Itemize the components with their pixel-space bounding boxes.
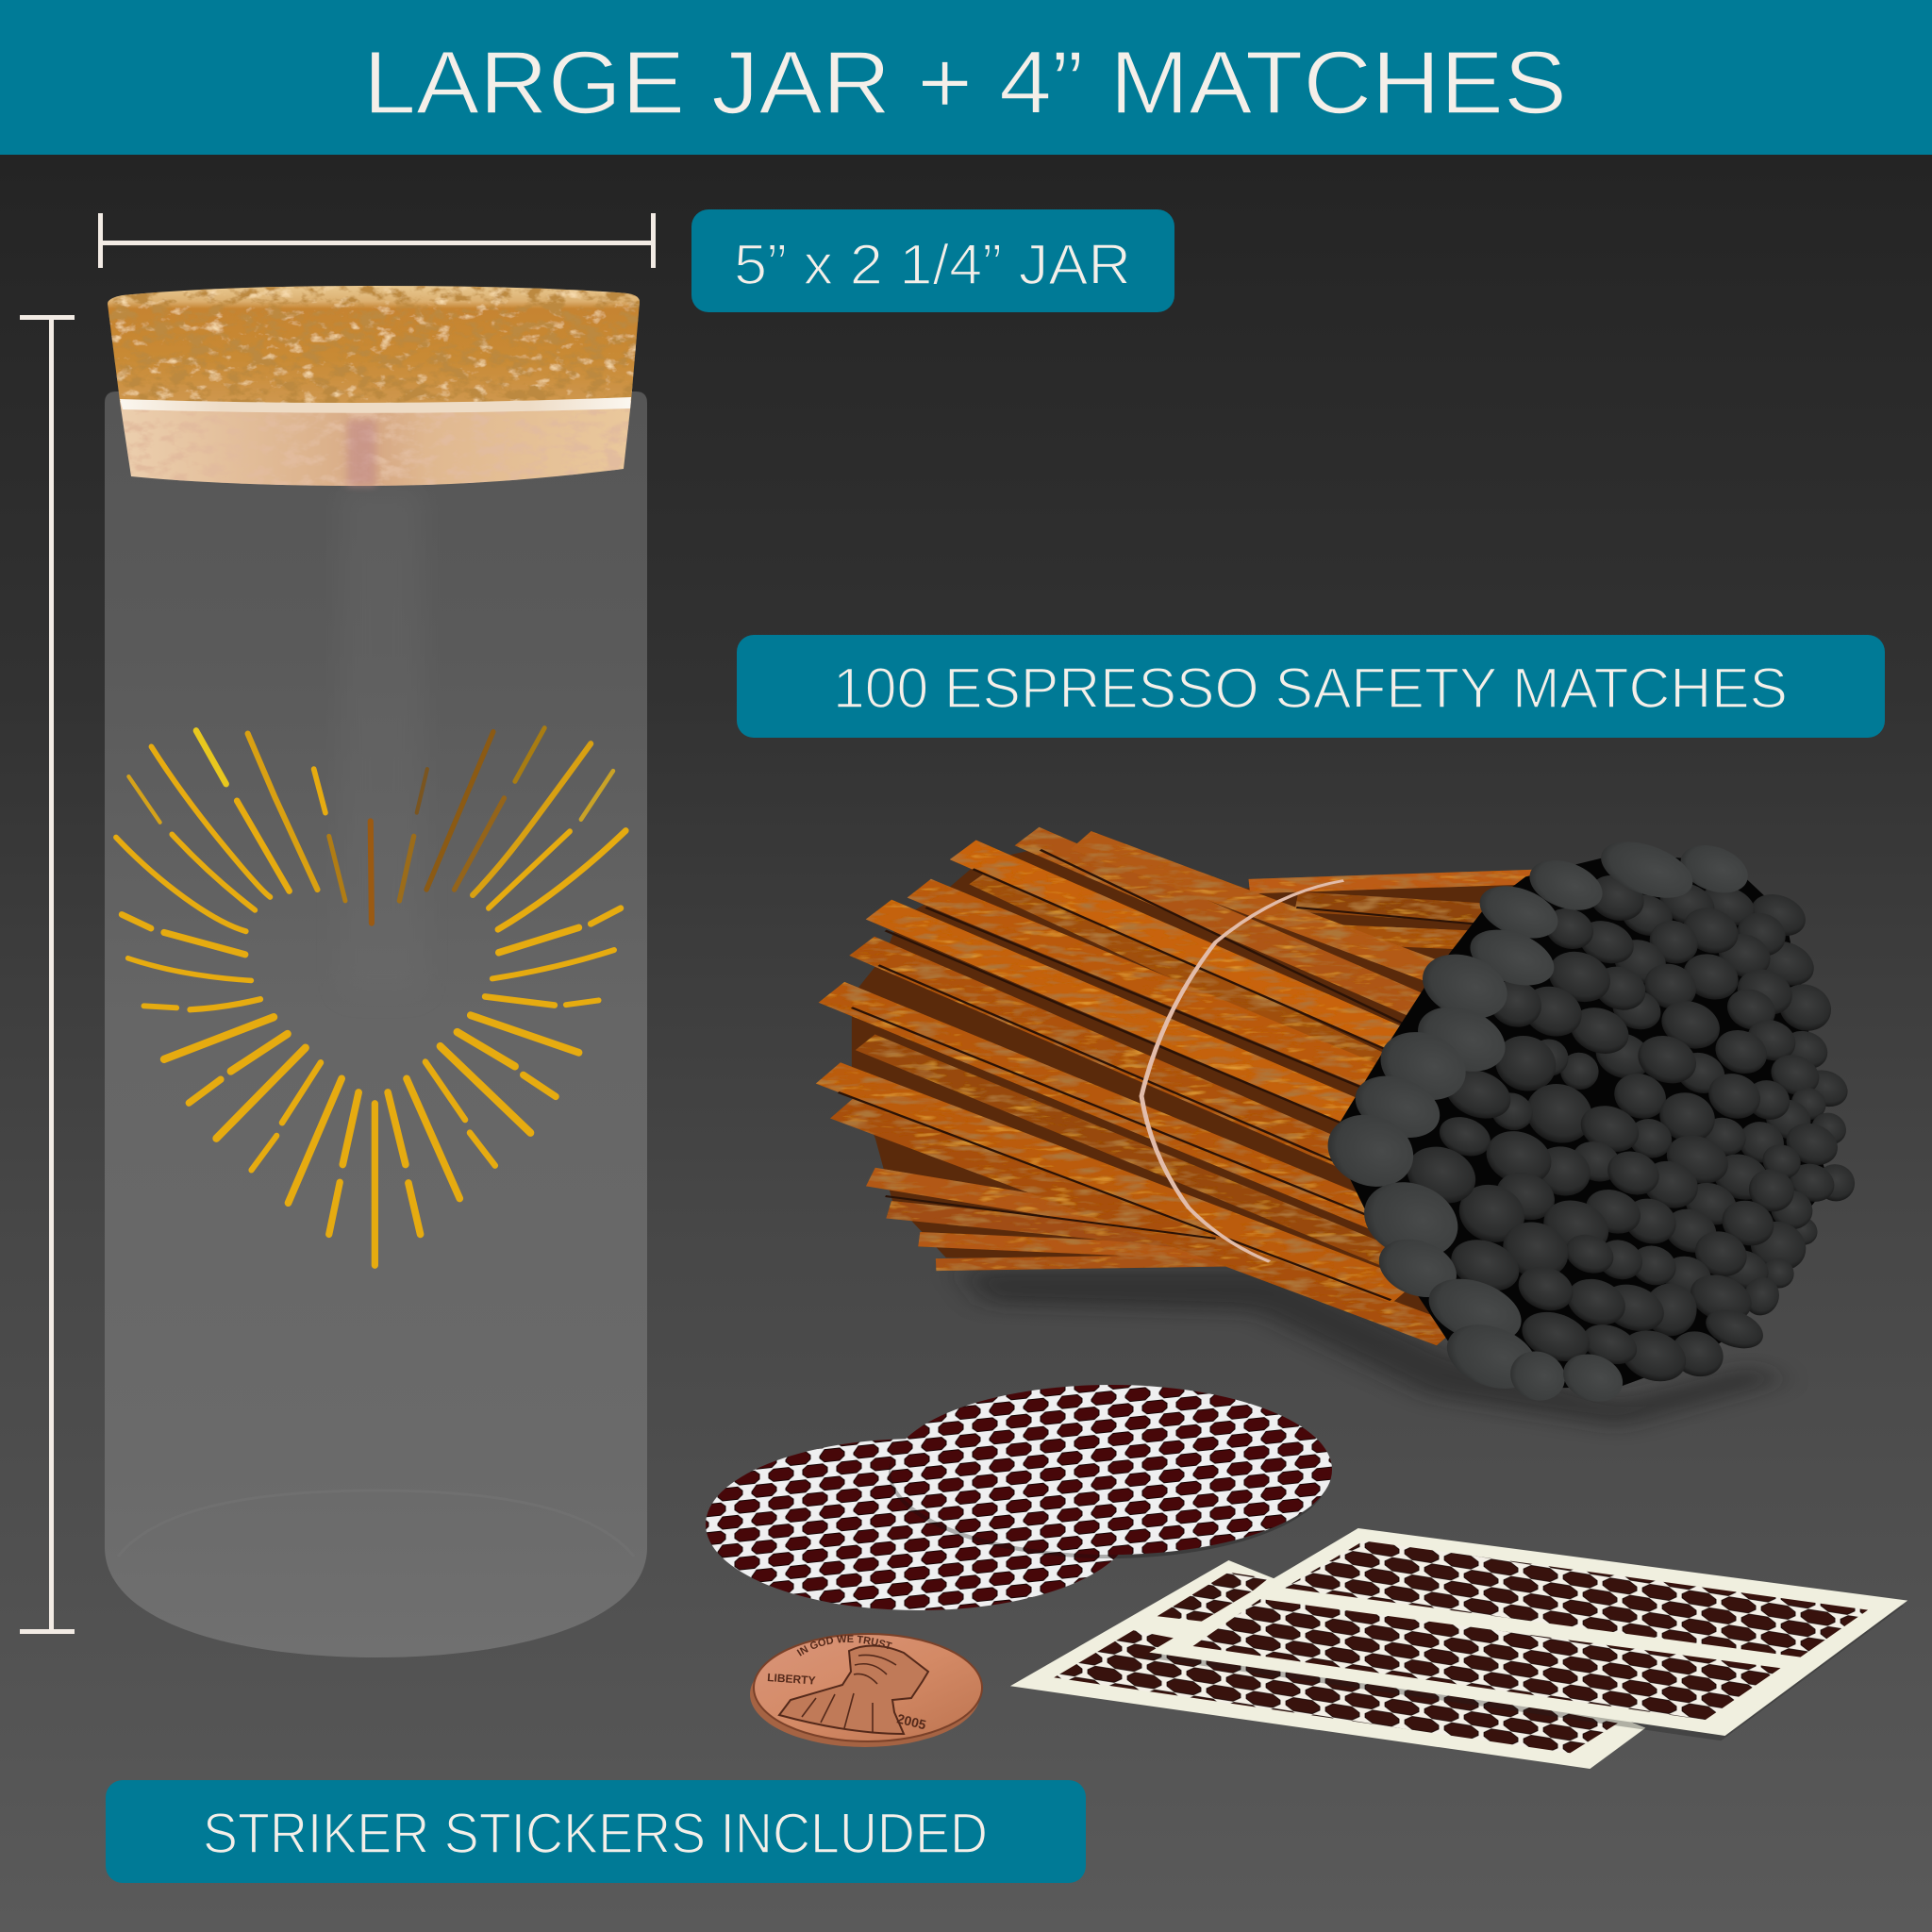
gold heart sunburst xyxy=(116,728,625,1265)
width dimension line xyxy=(98,213,656,268)
penny xyxy=(750,1633,983,1747)
dark head mass xyxy=(1330,854,1829,1389)
front disc xyxy=(891,1385,1332,1555)
label: jar size xyxy=(691,209,1174,312)
match sticks xyxy=(828,837,1539,1336)
cork white band xyxy=(120,397,631,413)
Lincoln bust xyxy=(779,1645,928,1734)
stick dark seams xyxy=(839,850,1506,1300)
glass jar xyxy=(105,391,647,1657)
back sheet xyxy=(1010,1560,1645,1769)
striker sticker discs xyxy=(706,1385,1332,1610)
label: matches xyxy=(737,635,1885,738)
penny inscriptions: IN GOD WE TRUST xyxy=(796,1635,892,1657)
penny: LIBERTY xyxy=(767,1671,816,1688)
striker sticker sheets xyxy=(1010,1528,1907,1769)
penny face xyxy=(754,1634,982,1741)
label: striker stickers xyxy=(106,1780,1086,1883)
label: matches: 100 ESPRESSO SAFETY MATCHES xyxy=(833,657,1788,720)
small match heads xyxy=(1399,868,1860,1390)
penny edge xyxy=(750,1641,980,1747)
cork lower part inside jar xyxy=(120,401,631,486)
header banner xyxy=(0,0,1932,155)
front sheet xyxy=(1145,1533,1904,1740)
bundle shadow xyxy=(959,1270,1782,1427)
cork upper part xyxy=(108,286,640,404)
large front match heads xyxy=(1318,831,1755,1409)
cork lid xyxy=(108,286,640,486)
cork reflection strip xyxy=(347,420,375,486)
label: jar size: 5” x 2 1/4” JAR xyxy=(734,233,1131,296)
stick underlay xyxy=(852,850,1586,1339)
label: striker stickers: STRIKER STICKERS INCLUDED xyxy=(203,1802,988,1865)
bust hair and coat detail xyxy=(802,1655,896,1732)
rubber band xyxy=(1141,880,1343,1261)
back disc xyxy=(706,1439,1132,1610)
match bundle xyxy=(828,831,1860,1427)
title: LARGE JAR + 4” MATCHES xyxy=(363,33,1567,133)
front disc shadow xyxy=(889,1389,1330,1558)
height dimension line xyxy=(20,315,75,1634)
penny: 2005 xyxy=(895,1710,928,1732)
